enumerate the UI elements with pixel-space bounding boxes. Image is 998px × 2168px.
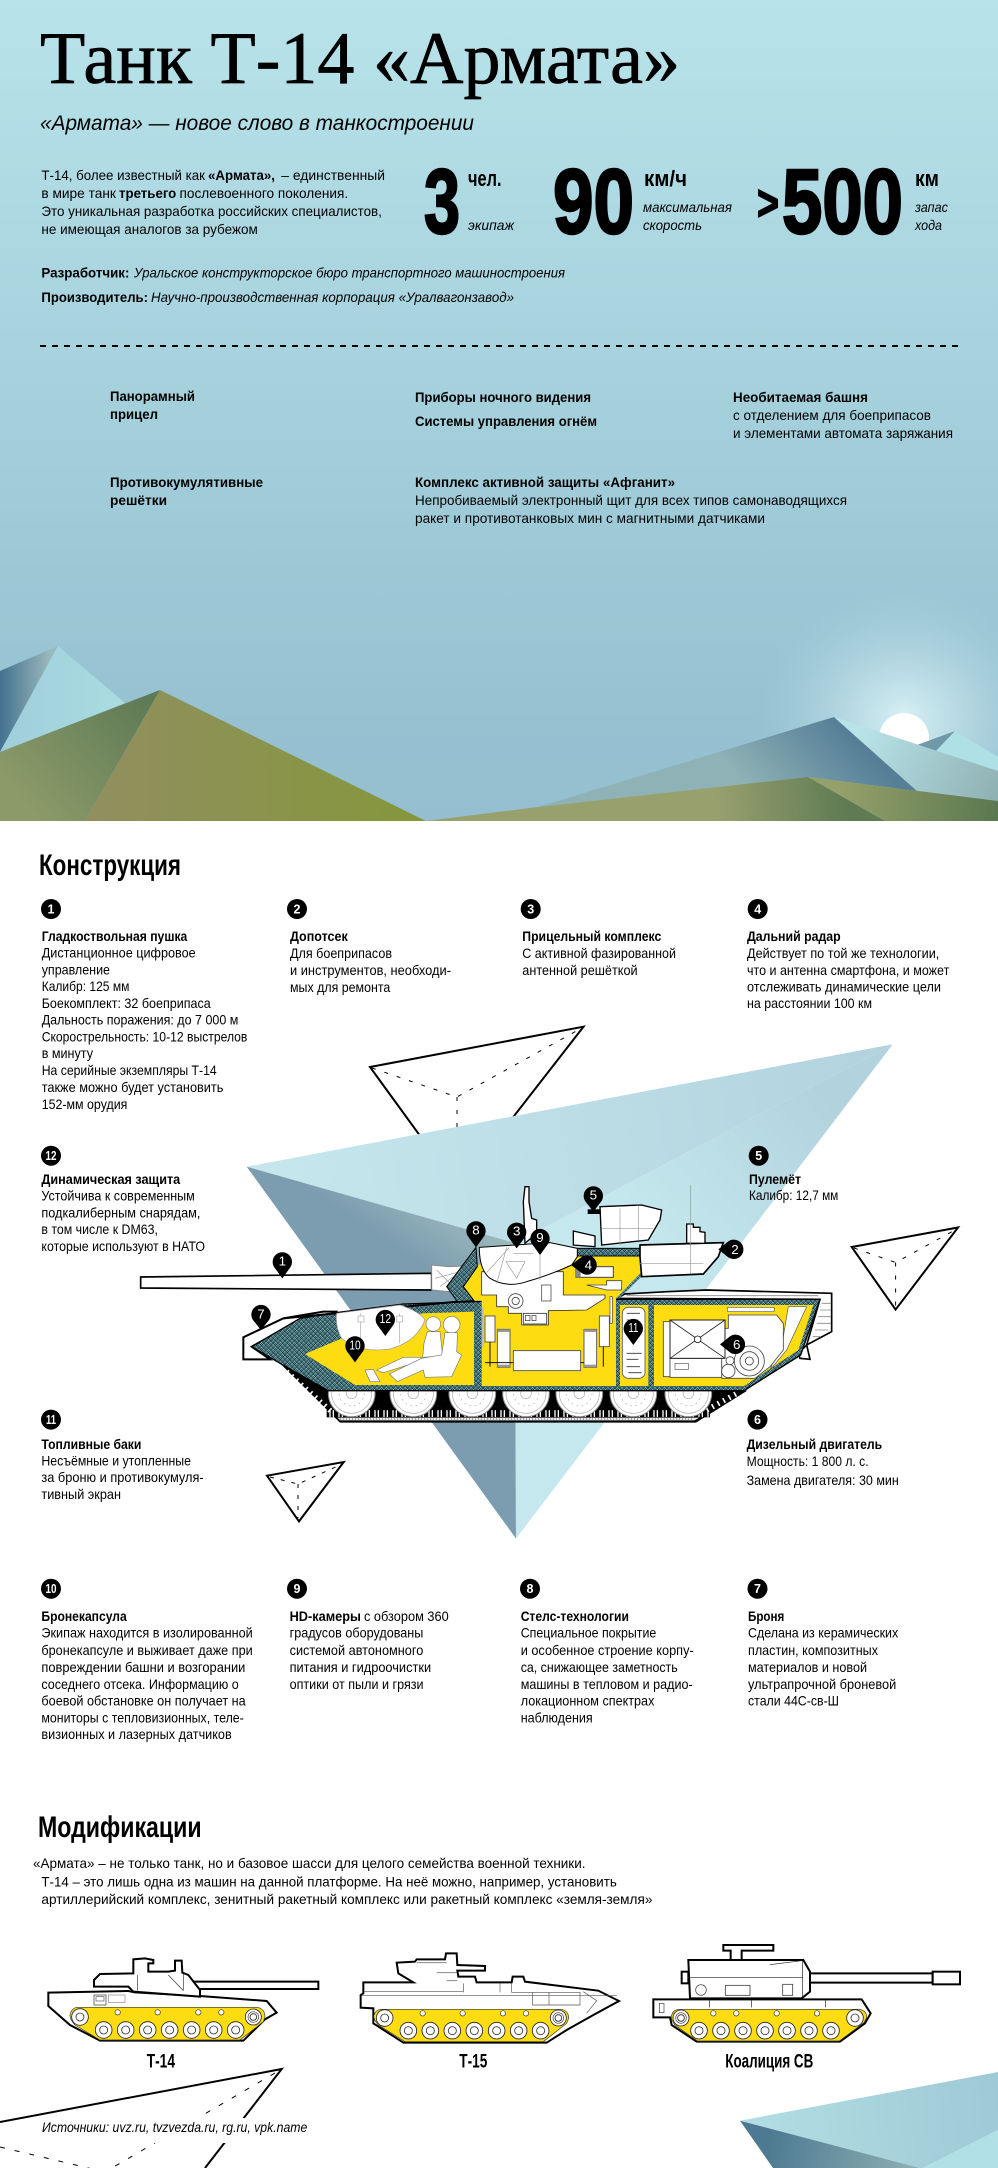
spec 9: HD cameras: 9 (294, 1582, 301, 1596)
intro text: не имеющая аналогов за рубежом (41, 221, 258, 237)
feature: panoramic sight: Панорамный (110, 388, 195, 404)
spec 8: stealth: 8 (527, 1582, 534, 1596)
spec 8: stealth: са, снижающее заметность (521, 1659, 678, 1675)
spec 6: diesel engine: 6 (754, 1413, 761, 1427)
periscope and sensors (523, 1187, 705, 1247)
feature: unmanned turret: с отделением для боеприпасов (733, 407, 931, 423)
modifications intro: артиллерийский комплекс, зенитный ракетный комплекс или ракетный комплекс «земля-земля» (41, 1891, 653, 1907)
spec 6: diesel engine: Мощность: 1 800 л. с. (747, 1453, 869, 1469)
spec 6: diesel engine: Замена двигателя: 30 мин (747, 1472, 899, 1488)
spec 9: HD cameras: градусов оборудованы (290, 1625, 423, 1641)
paper plane small (267, 1462, 344, 1521)
feature: anti-cumulative grilles: Противокумулятивные (110, 474, 263, 490)
stat: speed: скорость (643, 217, 702, 233)
spec 12: reactive armour: которые используют в НАТО (41, 1238, 205, 1254)
spec 1: gun (41, 899, 247, 1112)
front hull plate (243, 1312, 337, 1359)
stat: speed: км/ч (644, 166, 687, 191)
tank: T-14 (48, 1958, 318, 2041)
spec 1: gun: Дальность поражения: до 7 000 м (42, 1012, 238, 1028)
modifications intro: «Армата» – не только танк, но и базовое шасси для целого семейства военной техники. (33, 1855, 586, 1871)
spec 4: long range radar: Дальний радар (747, 928, 841, 944)
marker 1: 1 (279, 1253, 286, 1268)
stat: crew: экипаж (468, 217, 515, 233)
subtitle: «Армата» — новое слово в танкостроении (40, 112, 474, 135)
rear deck (617, 1290, 832, 1359)
spec 9: HD cameras: оптики от пыли и грязи (290, 1676, 424, 1692)
feature: night vision and fire control: Системы управления огнём (415, 413, 597, 429)
stat: crew: чел. (468, 166, 502, 191)
spec 10: armoured capsule: Бронекапсула (41, 1608, 127, 1624)
turret armour band (447, 1247, 477, 1302)
marker 6: 6 (733, 1337, 740, 1352)
tank: Koalitsiya SV (653, 1945, 960, 2042)
gun barrel (141, 1265, 463, 1292)
stat: range: км (915, 166, 939, 191)
spec 2: rear compartment: 2 (294, 902, 301, 916)
stat: range: 500 (782, 151, 903, 253)
marker 11: 11 (628, 1320, 638, 1335)
feature: Afghanit active protection: Непробиваемый электронный щит для всех типов самонаводящихся (415, 492, 847, 508)
marker 1 (273, 1252, 292, 1278)
spec 5: machine gun: Пулемёт (749, 1171, 801, 1187)
spec 11: fuel tanks (41, 1410, 204, 1502)
label: T-14: Т-14 (147, 2052, 175, 2073)
spec 7: armour: Броня (748, 1608, 784, 1624)
marker 10 (345, 1336, 365, 1362)
marker 7: 7 (257, 1307, 265, 1322)
feature: night vision and fire control: Приборы ночного видения (415, 389, 591, 405)
stat: crew (424, 151, 515, 253)
spec 9: HD cameras: питания и гидроочистки (290, 1659, 431, 1675)
paper plane top (370, 1027, 584, 1190)
feature: panoramic sight (110, 388, 195, 422)
spec 12: reactive armour: 12 (46, 1149, 57, 1163)
spec 9: HD cameras (287, 1579, 449, 1692)
spec 5: machine gun: 5 (755, 1149, 762, 1163)
marker 5: 5 (590, 1187, 597, 1202)
spec 3: targeting complex (521, 899, 676, 978)
spec 2: rear compartment: Допотсек (290, 928, 349, 944)
spec 8: stealth: Специальное покрытие (521, 1625, 656, 1641)
spec 12: reactive armour: подкалиберным снарядам, (41, 1204, 200, 1220)
mountains left (0, 646, 426, 821)
spec 7: armour: ультрапрочной броневой (748, 1676, 896, 1692)
feature: unmanned turret: Необитаемая башня (733, 389, 868, 405)
spec 5: machine gun: Калибр: 12,7 мм (749, 1187, 838, 1203)
central polygon backdrop (247, 1044, 893, 1539)
feature: anti-cumulative grilles: решётки (110, 492, 167, 508)
marker 2: 2 (731, 1242, 739, 1257)
marker 11 (624, 1319, 643, 1345)
marker 7 (251, 1305, 271, 1330)
spec 10: armoured capsule: мониторы с тепловизионных, теле- (41, 1709, 244, 1725)
turret dome (479, 1243, 577, 1284)
sources: Источники: uvz.ru, tvzvezda.ru, rg.ru, vpk.name (42, 2119, 307, 2135)
spec 1: gun: 152-мм орудия (42, 1096, 127, 1112)
armour hull (252, 1299, 820, 1391)
mountains right (426, 717, 998, 821)
marker 12: 12 (380, 1311, 391, 1326)
intro text: послевоенного поколения. (180, 185, 348, 201)
spec 1: gun: Скорострельность: 10-12 выстрелов (42, 1028, 247, 1044)
section heading: modifications: Модификации (38, 1811, 202, 1844)
spec 6: diesel engine: Дизельный двигатель (747, 1436, 883, 1452)
spec 11: fuel tanks: тивный экран (41, 1486, 121, 1502)
spec 12: reactive armour (41, 1146, 205, 1254)
spec 4: long range radar: на расстоянии 100 км (747, 995, 872, 1011)
marker 2 (718, 1240, 743, 1259)
sources (30, 2118, 315, 2143)
modifications intro: Т-14 – это лишь одна из машин на данной платформе. На неё можно, например, установить (41, 1874, 617, 1890)
tank cutaway diagram (141, 1185, 832, 1423)
feature: Afghanit active protection: ракет и противотанковых мин с магнитными датчиками (415, 510, 765, 526)
intro text: «Армата», (208, 167, 275, 183)
road wheels (328, 1370, 712, 1417)
spec 10: armoured capsule: боевой обстановке он получает на (41, 1692, 246, 1708)
turret rear (640, 1243, 723, 1277)
spec 10: armoured capsule: 10 (46, 1582, 57, 1596)
spec 11: fuel tanks: Топливные баки (41, 1436, 141, 1452)
hero background (0, 0, 998, 821)
spec 1: gun: Калибр: 125 мм (42, 978, 129, 994)
spec 10: armoured capsule: Экипаж находится в изолированной (41, 1625, 253, 1641)
spec 8: stealth: Стелс-технологии (521, 1608, 629, 1624)
spec 9: HD cameras: HD-камеры (290, 1608, 361, 1624)
spec 10: armoured capsule: визионных и лазерных датчиков (41, 1726, 232, 1742)
spec 7: armour (748, 1579, 898, 1708)
spec 2: rear compartment (287, 899, 451, 995)
spec 7: armour: пластин, композитных (748, 1642, 878, 1658)
corner polygon bottom right (740, 2072, 998, 2168)
stat: range: запас (914, 199, 948, 215)
spec 12: reactive armour: Динамическая защита (41, 1171, 180, 1187)
intro text: в мире танк (41, 185, 117, 201)
developer and manufacturer (41, 264, 565, 305)
spec 12: reactive armour: Устойчива к современным (41, 1188, 195, 1204)
modifications intro (33, 1855, 653, 1907)
marker 4: 4 (585, 1258, 593, 1273)
spec 1: gun: управление (42, 961, 110, 977)
spec 7: armour: стали 44С-св-Ш (748, 1692, 839, 1708)
spec 10: armoured capsule: бронекапсуле и выживает даже при (41, 1642, 253, 1658)
paper plane bottom left (0, 2069, 282, 2168)
label: Koalitsiya SV: Коалиция СВ (725, 2052, 813, 2073)
spec 9: HD cameras: с обзором 360 (364, 1608, 449, 1624)
tracks (280, 1363, 747, 1423)
feature: unmanned turret (733, 389, 953, 441)
stat: range: > (757, 175, 779, 231)
marker 4 (571, 1255, 597, 1275)
paper plane right (852, 1228, 958, 1310)
stat: speed: максимальная (643, 199, 732, 215)
marker 12 (376, 1310, 395, 1336)
spec 10: armoured capsule: соседнего отсека. Информацию о (41, 1676, 239, 1692)
spec 2: rear compartment: мых для ремонта (290, 979, 390, 995)
intro text: – единственный (281, 167, 385, 183)
spec 3: targeting complex: С активной фазированной (522, 945, 676, 961)
spec 10: armoured capsule: повреждении башни и возгорании (41, 1659, 245, 1675)
spec 4: long range radar (747, 899, 950, 1011)
spec 1: gun: На серийные экземпляры Т-14 (42, 1062, 217, 1078)
spec 11: fuel tanks: 11 (46, 1413, 56, 1427)
spec 3: targeting complex: 3 (527, 902, 534, 916)
feature: anti-cumulative grilles (110, 474, 263, 508)
spec 5: machine gun (749, 1146, 838, 1203)
spec 4: long range radar: отслеживать динамические цели (747, 978, 941, 994)
spec 1: gun: Дистанционное цифровое (42, 944, 196, 960)
spec 8: stealth: локационном спектрах (521, 1692, 654, 1708)
spec 4: long range radar: что и антенна смартфона, и может (747, 962, 950, 978)
crew figures (365, 1316, 462, 1382)
marker 6 (720, 1335, 745, 1354)
sun glow (750, 585, 998, 821)
marker 5 (584, 1186, 603, 1212)
marker 8: 8 (472, 1222, 480, 1237)
intro text: Это уникальная разработка российских специалистов, (41, 203, 382, 219)
spec 7: armour: Сделана из керамических (748, 1625, 898, 1641)
fuel compartment (620, 1305, 648, 1386)
feature: Afghanit active protection: Комплекс активной защиты «Афганит» (415, 474, 675, 490)
feature: unmanned turret: и элементами автомата заряжания (733, 425, 953, 441)
spec 8: stealth: наблюдения (521, 1709, 593, 1725)
marker 3 (507, 1223, 526, 1248)
spec 1: gun: Боекомплект: 32 боеприпаса (42, 995, 211, 1011)
developer and manufacturer: Уральское конструкторское бюро транспортного машиностроения (133, 264, 565, 280)
spec 7: armour: материалов и новой (748, 1659, 867, 1675)
track belt (337, 1417, 701, 1421)
intro text (41, 167, 385, 237)
spec 8: stealth (520, 1579, 694, 1725)
spec 12: reactive armour: в том числе к DM63, (41, 1221, 158, 1237)
spec 11: fuel tanks: Несъёмные и утопленные (41, 1452, 191, 1468)
feature: night vision and fire control (415, 389, 597, 429)
stat: speed: 90 (553, 151, 634, 253)
stat: crew: 3 (424, 151, 460, 253)
spec 1: gun: Гладкоствольная пушка (42, 928, 187, 944)
spec 3: targeting complex: Прицельный комплекс (522, 928, 661, 944)
spec 2: rear compartment: Для боеприпасов (290, 945, 392, 961)
feature: Afghanit active protection (415, 474, 847, 526)
spec 9: HD cameras: системой автономного (290, 1642, 423, 1658)
marker 3: 3 (513, 1224, 520, 1239)
developer and manufacturer: Разработчик: (41, 264, 129, 280)
marker 8 (466, 1221, 486, 1247)
stat: speed (553, 151, 732, 253)
stat: range: хода (914, 217, 942, 233)
tank: T-15 (361, 1953, 619, 2043)
spec 10: armoured capsule (41, 1579, 253, 1742)
section heading: construction: Конструкция (39, 849, 181, 882)
title: Танк Т-14 «Армата» (40, 18, 680, 100)
spec 1: gun: 1 (48, 902, 55, 916)
spec 1: gun: в минуту (42, 1045, 93, 1061)
spec 4: long range radar: Действует по той же технологии, (747, 945, 939, 961)
central compartment (461, 1248, 642, 1386)
developer and manufacturer: Производитель: (41, 289, 148, 305)
intro text: третьего (119, 185, 176, 201)
spec 4: long range radar: 4 (754, 902, 761, 916)
spec 1: gun: также можно будет установить (42, 1079, 223, 1095)
spec 8: stealth: машины в тепловом и радио- (521, 1676, 693, 1692)
spec 7: armour: 7 (754, 1582, 761, 1596)
spec 2: rear compartment: и инструментов, необходи- (290, 962, 451, 978)
crew compartment (305, 1305, 474, 1385)
spec 3: targeting complex: антенной решёткой (522, 962, 638, 978)
spec 6: diesel engine (747, 1410, 899, 1488)
developer and manufacturer: Научно-производственная корпорация «Уралвагонзавод» (151, 289, 514, 305)
marker 9 (530, 1229, 550, 1255)
marker 10: 10 (349, 1337, 361, 1352)
spec 11: fuel tanks: за броню и противокумуля- (41, 1469, 204, 1485)
intro text: Т-14, более известный как (41, 167, 206, 183)
label: T-15: Т-15 (459, 2052, 488, 2073)
feature: panoramic sight: прицел (110, 406, 158, 422)
sun (879, 713, 929, 763)
engine compartment (654, 1305, 813, 1386)
spec 8: stealth: и особенное строение корпу- (521, 1642, 694, 1658)
marker 9: 9 (536, 1230, 544, 1245)
